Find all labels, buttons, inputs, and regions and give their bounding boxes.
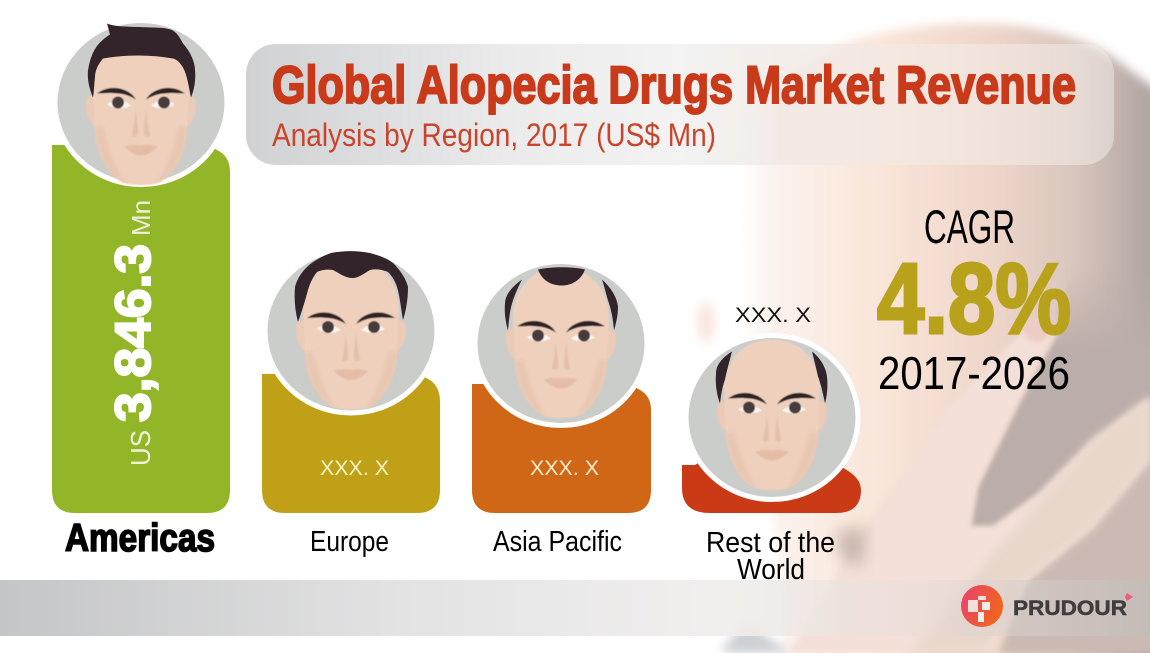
bar: Americas: [52, 100, 230, 513]
value: Europe: XXX. X: [320, 457, 389, 480]
logo: Prudour: [961, 585, 1133, 627]
value: Rest of the World: XXX. X: [735, 304, 811, 327]
title panel: [246, 44, 1114, 165]
label: Asia Pacific: Asia Pacific: [493, 526, 622, 558]
value: Americas: Mn: [126, 200, 156, 236]
icon: balding face, Rest of the World: [686, 336, 858, 500]
CAGR period: 2017-2026: [878, 347, 1070, 399]
label: Rest of the World: World: [737, 554, 805, 586]
subtitle: Analysis by Region, 2017 (US$ Mn): [272, 117, 716, 153]
label: Rest of the World: [706, 527, 835, 586]
CAGR value: 4.8%: [877, 243, 1071, 355]
label: Europe: Europe: [310, 526, 389, 558]
bar: Rest of the World: [682, 420, 861, 513]
label: Americas: Americas: [65, 517, 215, 560]
value: Americas: US: [125, 430, 156, 466]
value: Asia Pacific: XXX. X: [530, 457, 599, 480]
value: Americas: [105, 200, 161, 466]
icon: receding hair face, Europe: [265, 249, 437, 413]
bar: Asia Pacific: [472, 343, 651, 513]
icon: full hair face, Americas: [55, 20, 227, 185]
CAGR label: CAGR: [924, 200, 1015, 253]
background photo: man holding balding head: [697, 23, 1150, 653]
bottom band: [0, 580, 1150, 636]
logo: Prudour: PRUDOUR: [1013, 597, 1127, 620]
value: Americas: 3,846.3: [105, 244, 161, 422]
bar: Europe: [262, 331, 440, 513]
icon: thinning hair face, Asia Pacific: [475, 262, 647, 426]
label: Rest of the World: Rest of the: [706, 527, 835, 559]
